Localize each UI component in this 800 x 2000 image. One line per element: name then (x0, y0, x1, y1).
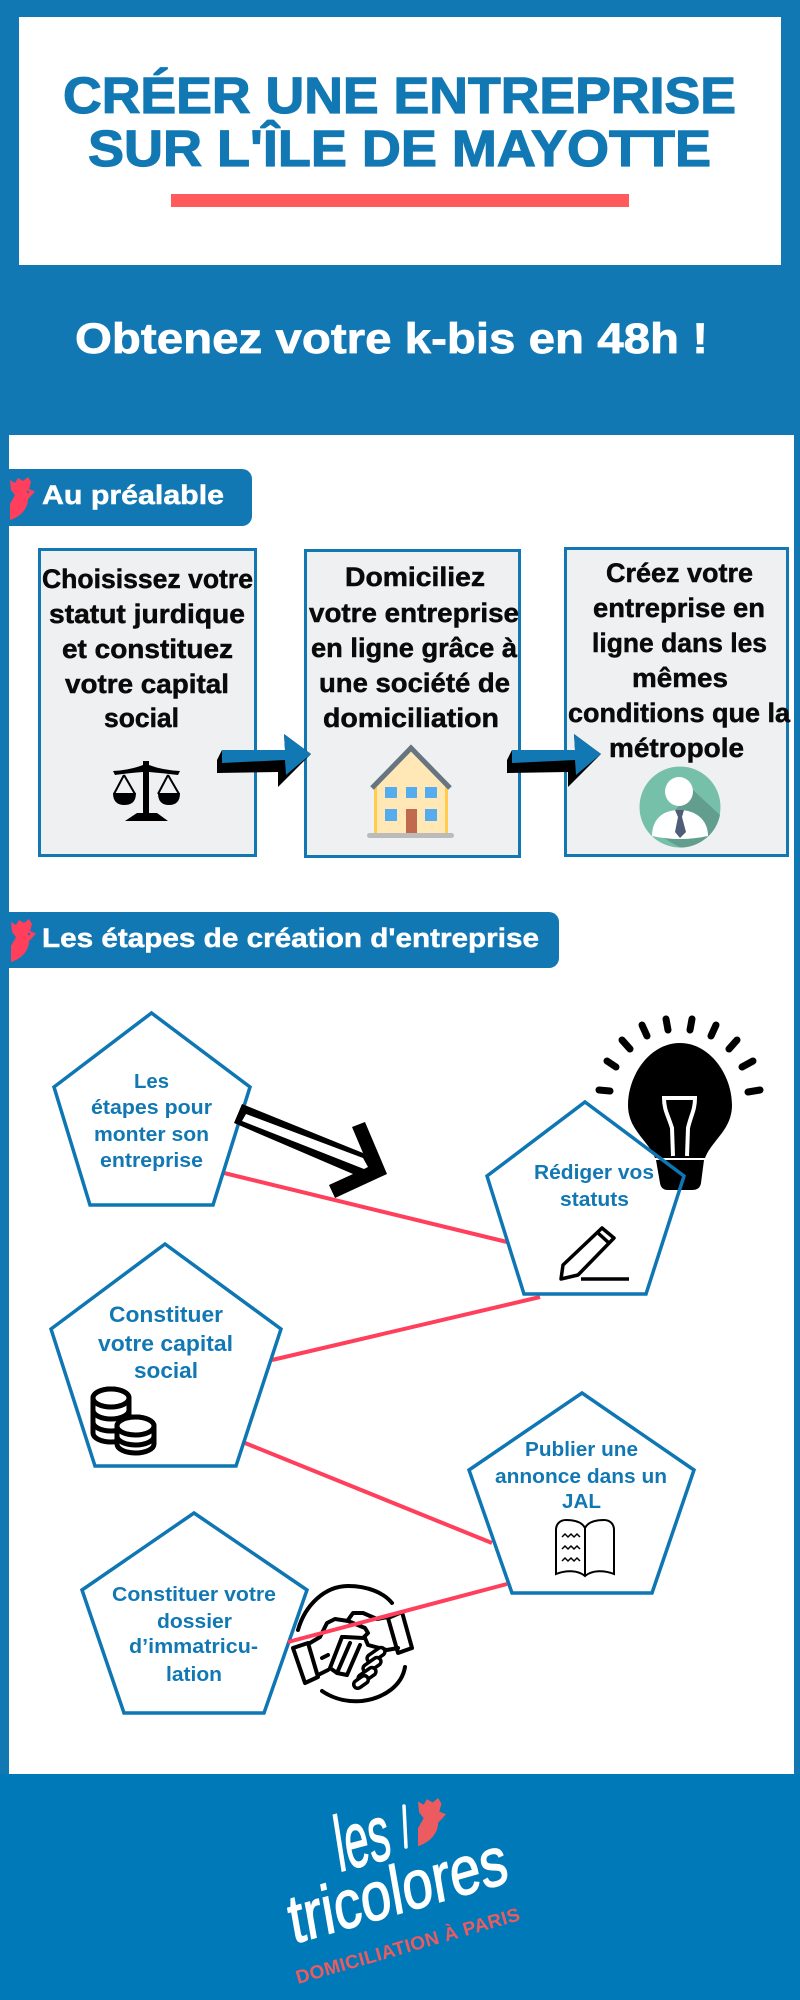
icon: handshake (293, 1586, 412, 1701)
text: choisissez: votre capital (65, 669, 229, 699)
text: créez (568, 558, 791, 763)
arrow: black hollow (234, 1104, 387, 1198)
text: domiciliez: en ligne grâce à (311, 633, 518, 663)
text: domiciliez (309, 562, 519, 733)
step: rédiger vos statuts (487, 1102, 684, 1294)
text: domiciliez: votre entreprise (309, 598, 519, 628)
icon: person avatar (640, 766, 720, 848)
step text: annonce dans un (495, 1466, 667, 1488)
logo tagline: DOMICILIATION À PARIS (293, 1904, 522, 1989)
logo wordmark: tricolores (282, 1821, 513, 1959)
heading text: Les étapes de création d'entreprise (42, 923, 539, 953)
connector line (288, 1584, 507, 1642)
step text: Constituer votre (112, 1584, 276, 1606)
text: domiciliez: une société de (319, 668, 510, 698)
text: choisissez: statut jurdique (49, 599, 245, 629)
logo wordmark: les (328, 1787, 396, 1889)
step text (534, 1162, 654, 1211)
text: choisissez: Choisissez votre (42, 564, 253, 594)
step text: votre capital (98, 1331, 233, 1356)
title (63, 67, 736, 177)
logo: les tricolores (282, 1787, 522, 1989)
text: domiciliez: Domiciliez (345, 562, 485, 592)
step: constituer votre dossier (82, 1513, 307, 1713)
panel: statut juridique (40, 550, 256, 856)
step text: entreprise (100, 1150, 203, 1172)
icon: rooster (10, 477, 35, 520)
step text (495, 1439, 667, 1513)
panel: création en ligne (566, 548, 791, 856)
arrow: step 1 to step 2 (217, 734, 311, 787)
section heading: étapes (9, 912, 559, 968)
step: constituer votre capital social (51, 1244, 281, 1466)
step text: Constituer (109, 1302, 223, 1327)
panel: domiciliation (306, 550, 520, 856)
step text: Rédiger vos (534, 1162, 654, 1184)
step text: dossier (157, 1611, 232, 1633)
text: créez: conditions que la (568, 698, 791, 728)
step text: statuts (560, 1189, 629, 1211)
step text: étapes pour (91, 1097, 212, 1119)
title panel (19, 17, 781, 265)
step: publier une annonce (469, 1393, 694, 1593)
title: SUR L'ÎLE DE MAYOTTE (88, 119, 711, 177)
step text: Les (134, 1071, 169, 1093)
text: créez: mêmes (632, 663, 728, 693)
step text: JAL (562, 1491, 601, 1513)
logo rooster (418, 1798, 446, 1846)
icon: scales (113, 761, 180, 821)
text: choisissez: et constituez (62, 634, 233, 664)
text: créez: Créez votre (606, 558, 753, 588)
step text: lation (166, 1664, 222, 1686)
step text: d’immatricu- (129, 1636, 258, 1658)
arrow: step 2 to step 3 (507, 734, 601, 787)
text: créez: métropole (609, 733, 744, 763)
icon: rooster (11, 919, 36, 962)
title: CRÉER UNE ENTREPRISE (63, 67, 736, 124)
text: créez: entreprise en (593, 593, 765, 623)
text: choisissez: social (104, 703, 179, 733)
logo divider (404, 1806, 406, 1847)
connector lines (224, 1173, 540, 1543)
text: domiciliez: domiciliation (323, 703, 499, 733)
main white panel (9, 435, 794, 1774)
step text: monter son (94, 1124, 209, 1146)
heading text: Au préalable (42, 480, 224, 510)
subtitle: Obtenez votre k-bis en 48h ! (75, 315, 708, 363)
text: créez: ligne dans les (592, 628, 767, 658)
icon: light bulb (599, 1019, 760, 1190)
step text (98, 1302, 233, 1383)
icon: pencil (561, 1228, 629, 1279)
icon: coins (93, 1389, 154, 1453)
icon: open book (556, 1520, 614, 1576)
step: les étapes pour monter son entreprise (54, 1013, 250, 1205)
icon: house (367, 748, 454, 838)
step text: Publier une (525, 1439, 638, 1461)
footer band (0, 1774, 800, 2000)
step text: social (134, 1358, 198, 1383)
text: choisissez (42, 564, 253, 733)
title underline (171, 194, 629, 207)
step text (112, 1584, 276, 1686)
section heading: au préalable (9, 469, 252, 526)
step text (91, 1071, 212, 1172)
